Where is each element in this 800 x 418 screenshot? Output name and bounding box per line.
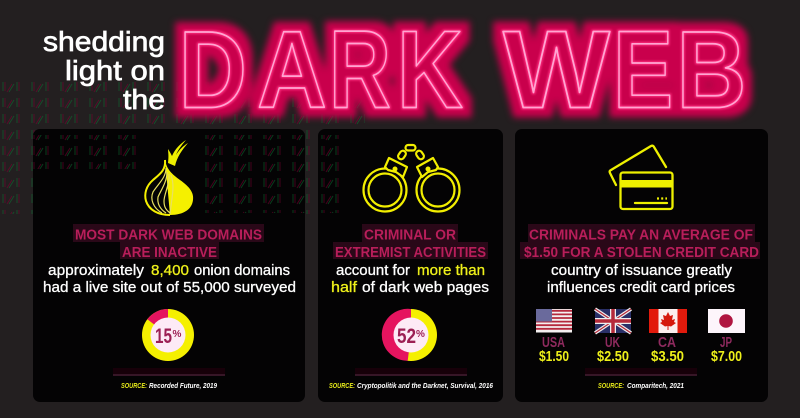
price: JP xyxy=(711,334,742,365)
heading xyxy=(520,224,760,261)
body text: more than xyxy=(417,263,485,279)
flag: Japan xyxy=(708,309,745,333)
title: DARK WEB neon: B xyxy=(676,8,746,131)
donut chart: 15%: % xyxy=(172,329,182,340)
source: SOURCE: xyxy=(598,381,624,390)
donut chart: 15% xyxy=(142,309,194,361)
price: USA: USA xyxy=(542,334,565,351)
donut chart: 52%: 52 xyxy=(397,325,416,348)
title: DARK WEB neon: A xyxy=(257,8,327,131)
price: UK: $2.50 xyxy=(597,348,629,365)
price: JP: $7.00 xyxy=(711,348,742,365)
flag: UK xyxy=(595,309,631,333)
price: CA xyxy=(651,334,684,365)
body text: 8,400 xyxy=(151,263,189,279)
body text: of dark web pages xyxy=(362,280,489,296)
panel: stolen credit cards xyxy=(515,129,768,402)
body text: half xyxy=(331,280,358,296)
subtitle: shedding light on the: the xyxy=(123,84,165,115)
price: UK xyxy=(597,334,629,365)
source: Comparitech, 2021 xyxy=(627,381,684,390)
icon: Tor onion xyxy=(145,140,193,215)
panel: inactive domains xyxy=(33,129,305,402)
source: SOURCE: xyxy=(329,381,355,390)
price: UK: UK xyxy=(605,334,620,351)
heading: MOST DARK WEB DOMAINS xyxy=(75,228,262,244)
price: CA: CA xyxy=(658,334,676,351)
subtitle: shedding light on the: light on xyxy=(65,55,165,86)
body text xyxy=(331,263,489,296)
body text xyxy=(43,263,296,296)
subtitle: shedding light on the: shedding xyxy=(43,26,165,57)
price: JP: JP xyxy=(720,334,732,351)
body text: approximately xyxy=(48,263,145,279)
price: CA: $3.50 xyxy=(651,348,684,365)
title: DARK WEB neon: E xyxy=(613,9,673,132)
heading: CRIMINAL OR xyxy=(364,228,456,244)
flag: USA xyxy=(536,309,572,332)
heading: EXTREMIST ACTIVITIES xyxy=(335,245,486,261)
subtitle: shedding light on the xyxy=(43,26,165,115)
body text: had a live site out of 55,000 surveyed xyxy=(43,280,296,296)
donut chart: 52%: % xyxy=(416,329,425,340)
body text: influences credit card prices xyxy=(547,280,735,296)
donut chart: 15%: 15 xyxy=(155,325,172,348)
source: Cryptopolitik and the Darknet, Survival, 2016 xyxy=(357,381,494,390)
donut chart: 52% xyxy=(382,309,437,361)
source: Recorded Future, 2019 xyxy=(149,381,218,390)
panel: criminal activities xyxy=(318,129,503,402)
icon: handcuffs xyxy=(364,145,460,212)
heading xyxy=(73,224,264,261)
source: SOURCE: xyxy=(121,381,147,390)
source xyxy=(598,381,684,390)
price: USA xyxy=(539,334,569,365)
price: USA: $1.50 xyxy=(539,348,569,365)
title: DARK WEB neon: W xyxy=(503,8,611,131)
heading: $1.50 FOR A STOLEN CREDIT CARD xyxy=(524,245,759,261)
heading: ARE INACTIVE xyxy=(122,245,217,261)
body text: onion domains xyxy=(194,263,290,279)
title: DARK WEB neon: D xyxy=(179,8,247,131)
heading xyxy=(333,224,488,261)
title: DARK WEB neon xyxy=(179,8,746,132)
flag: Canada xyxy=(649,309,687,333)
body text: country of issuance greatly xyxy=(551,263,733,279)
source xyxy=(121,381,218,390)
title: DARK WEB neon: K xyxy=(397,8,463,131)
heading: CRIMINALS PAY AN AVERAGE OF xyxy=(529,228,753,244)
body text xyxy=(547,263,735,296)
body text: account for xyxy=(336,263,410,279)
icon: credit cards xyxy=(610,146,672,209)
title: DARK WEB neon: R xyxy=(329,8,391,131)
